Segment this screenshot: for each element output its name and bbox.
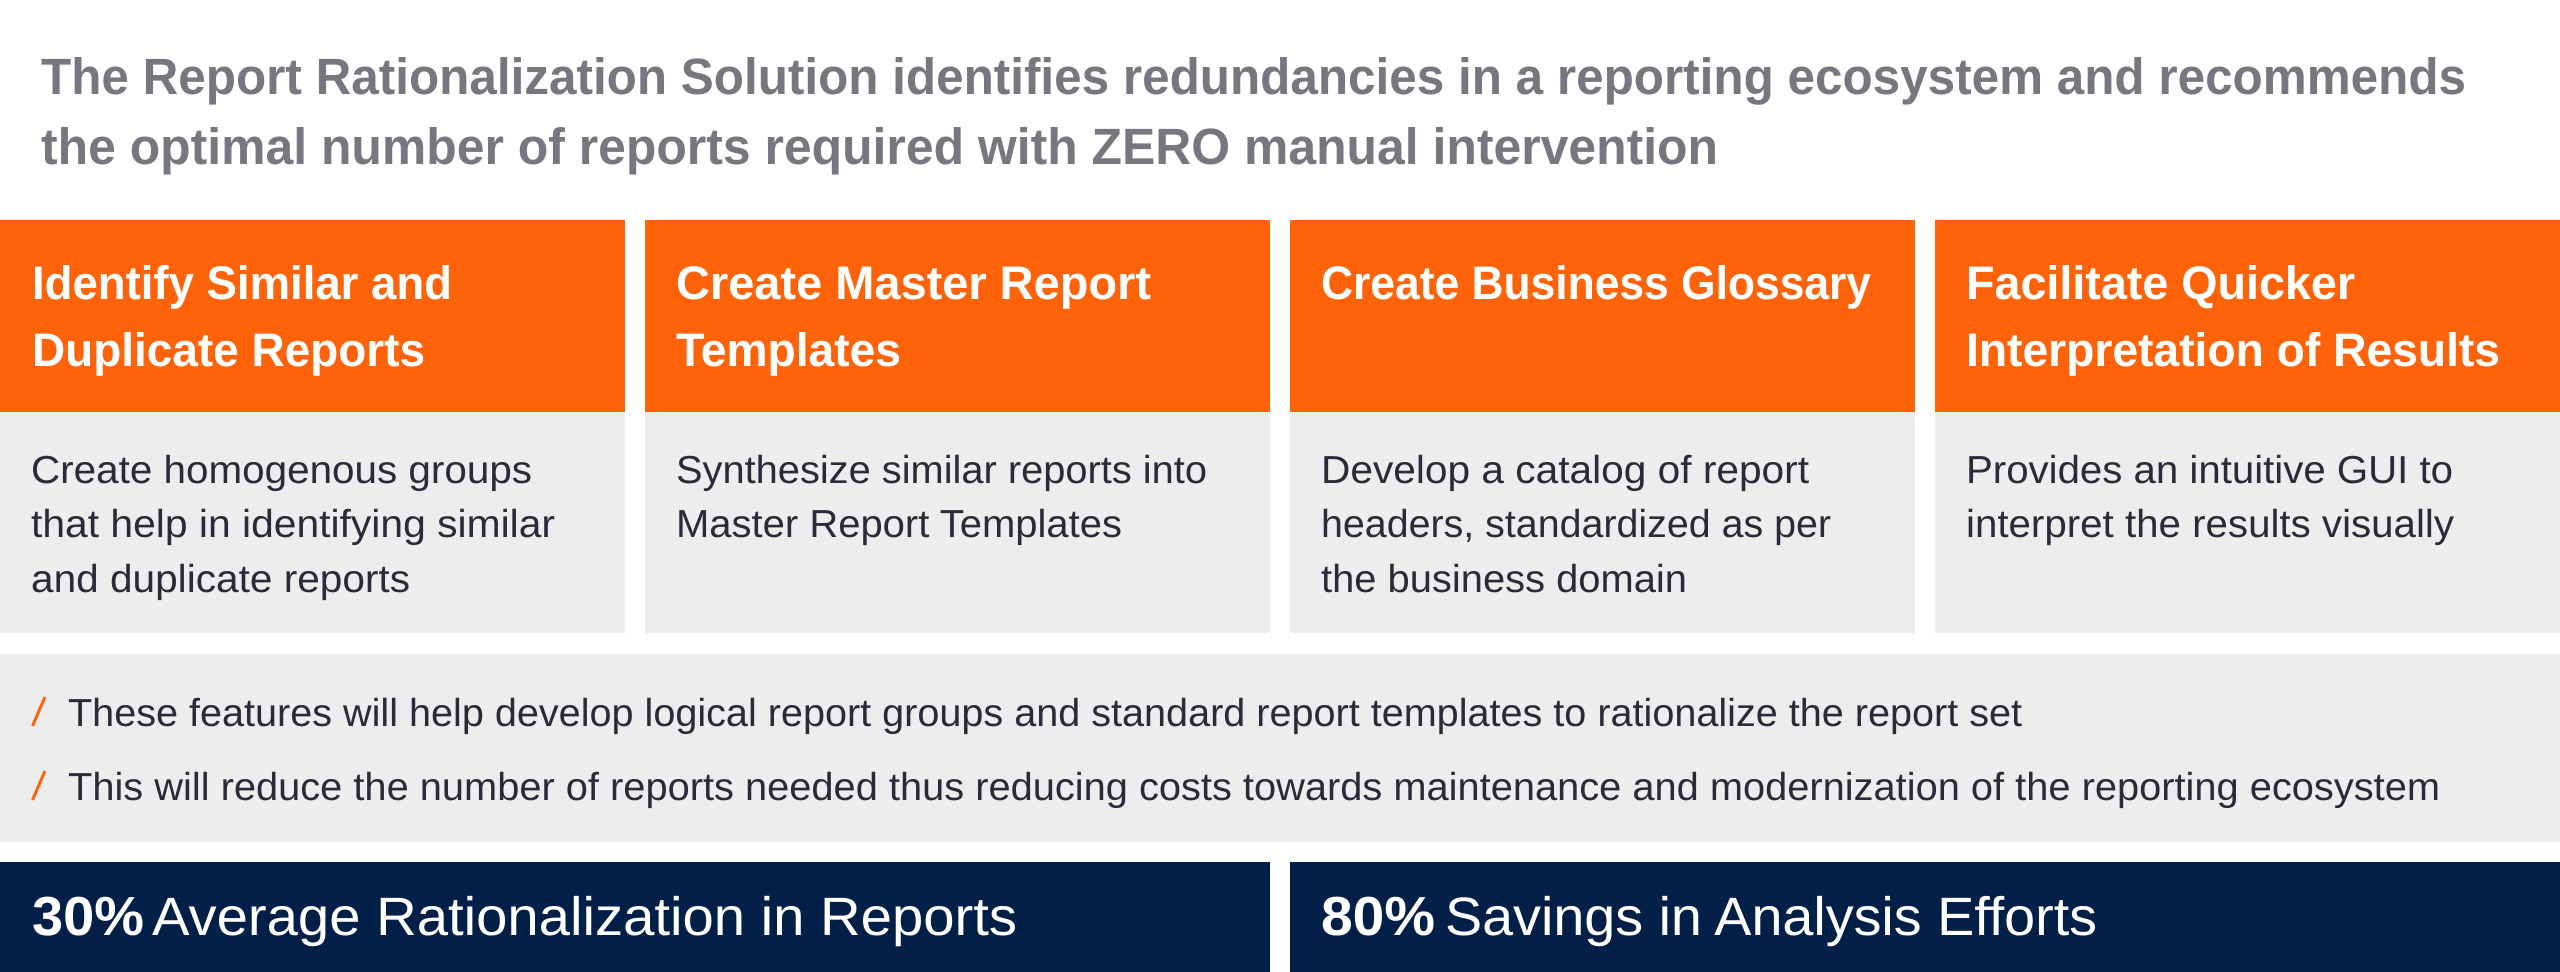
panel header: glossary: Create Business Glossary xyxy=(1321,256,1871,309)
panel header: templates xyxy=(645,220,1270,412)
title: The Report Rationalization Solution identifies redundancies in a reporting ecosystem and recommends xyxy=(41,48,2466,105)
stat panel: 80 percent: 80% xyxy=(1321,885,1435,947)
panel: facilitate quicker interpretation of results xyxy=(1935,220,2560,633)
stat panel: 80 percent: Savings in Analysis Efforts xyxy=(1445,887,2097,947)
panel: identify similar and duplicate reports xyxy=(0,220,625,633)
panel body: glossary xyxy=(1290,412,1915,633)
bullet two: This will reduce the number of reports needed thus reducing costs towards maintenance and modernization of the reporting ecosystem xyxy=(68,766,2440,809)
panel: create master report templates xyxy=(645,220,1270,633)
panel body: interpretation xyxy=(1935,412,2560,633)
panel header: templates: Templates xyxy=(676,323,901,376)
panel body: identify xyxy=(0,412,625,633)
panel body: glossary: Develop a catalog of report xyxy=(1321,449,1809,492)
panel body: glossary: headers, standardized as per xyxy=(1321,503,1831,546)
panel body: templates: Master Report Templates xyxy=(676,503,1122,546)
panel: benefits bullets xyxy=(0,654,2560,842)
panel header: glossary xyxy=(1290,220,1915,412)
panel body: identify: and duplicate reports xyxy=(31,558,410,601)
title: the optimal number of reports required with ZERO manual intervention xyxy=(41,118,1718,175)
panel body: identify: that help in identifying similar xyxy=(31,503,555,546)
panel body: glossary: the business domain xyxy=(1321,558,1687,601)
panel header: identify: Identify Similar and xyxy=(32,256,452,309)
panel body: templates xyxy=(645,412,1270,633)
panel body: interpretation: interpret the results visually xyxy=(1966,503,2455,546)
panel header: templates: Create Master Report xyxy=(676,256,1151,309)
panel header: identify xyxy=(0,220,625,412)
panel: create business glossary xyxy=(1290,220,1915,633)
panel body: identify: Create homogenous groups xyxy=(31,449,532,492)
stat panel: 30 percent xyxy=(0,862,1270,972)
stat panel: 30 percent: 30% xyxy=(32,885,144,947)
panel header: interpretation: Interpretation of Results xyxy=(1966,323,2500,376)
panel body: interpretation: Provides an intuitive GUI to xyxy=(1966,449,2453,492)
title xyxy=(41,48,2466,175)
panel header: identify: Duplicate Reports xyxy=(32,323,425,376)
stat panel: 30 percent: Average Rationalization in Reports xyxy=(152,887,1017,947)
bullet one: These features will help develop logical report groups and standard report templates to rationalize the report set xyxy=(68,692,2022,735)
panel body: templates: Synthesize similar reports into xyxy=(676,449,1207,492)
panel header: interpretation: Facilitate Quicker xyxy=(1966,256,2355,309)
panel header: interpretation xyxy=(1935,220,2560,412)
stat panel: 80 percent xyxy=(1290,862,2560,972)
